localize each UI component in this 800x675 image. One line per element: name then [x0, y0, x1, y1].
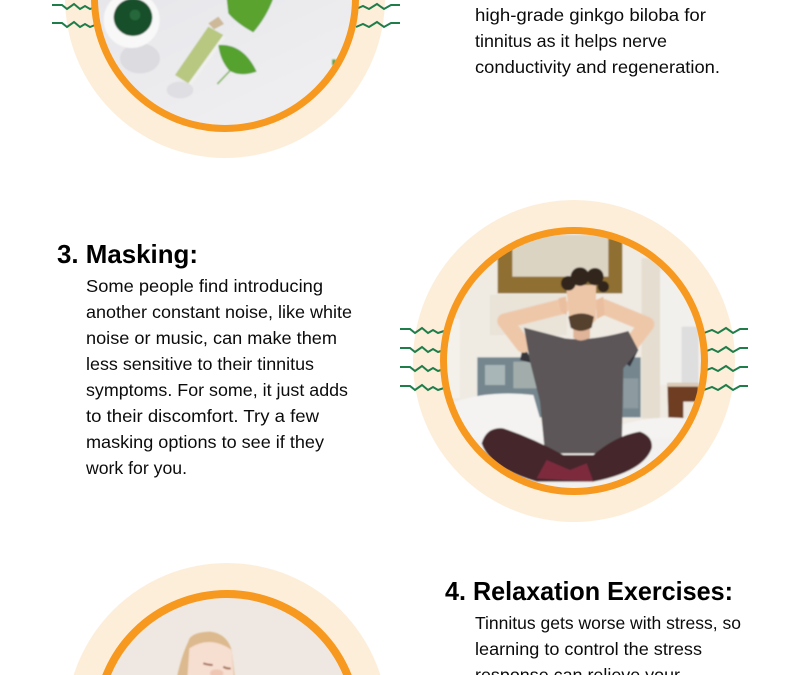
text block: ginkgo biloba: conductivity and regeneration.: [475, 57, 720, 77]
text block: ginkgo biloba: high-grade ginkgo biloba for: [475, 5, 706, 25]
heading: 3. Masking: 3. Masking:: [57, 239, 198, 269]
icon: sound waves left: [400, 328, 444, 390]
panel: relaxation image circle: [66, 563, 388, 675]
panel: ginkgo biloba image circle: [52, 0, 400, 158]
text block: masking: Some people find introducing: [86, 276, 323, 296]
text block: masking: less sensitive to their tinnitus: [86, 354, 314, 374]
icon: sound waves right: [704, 328, 748, 390]
text block: relaxation exercises: Tinnitus gets worse with stress, so: [475, 613, 741, 633]
photo: woman relaxing with eyes closed: [177, 632, 235, 675]
peach backdrop circle: [413, 200, 735, 522]
orange ring: [97, 594, 357, 675]
photo: man covering his ears on a bed: [440, 232, 707, 492]
panel: masking image circle: [400, 200, 748, 522]
peach backdrop circle: [65, 0, 385, 158]
orange ring: [95, 0, 355, 128]
text block: masking: [85, 276, 352, 478]
text block: ginkgo biloba: tinnitus as it helps nerve: [475, 31, 667, 51]
text block: masking: another constant noise, like white: [86, 302, 352, 322]
peach backdrop circle: [66, 563, 388, 675]
text block: ginkgo biloba: [475, 5, 720, 77]
text block: masking: to their discomfort. Try a few: [86, 406, 319, 426]
text block: masking: noise or music, can make them: [86, 328, 337, 348]
icon: sound waves right: [356, 4, 400, 27]
orange ring: [444, 231, 704, 491]
text block: masking: work for you.: [85, 458, 187, 478]
text block: masking: masking options to see if they: [86, 432, 324, 452]
heading: 4. Relaxation Exercises: 4. Relaxation Exercises:: [445, 576, 733, 606]
text block: relaxation exercises: learning to control the stress: [475, 639, 702, 659]
text block: relaxation exercises: [475, 613, 741, 675]
icon: sound waves left: [52, 4, 95, 27]
photo: ginkgo leaves and vial: [98, 0, 352, 125]
text block: masking: symptoms. For some, it just adds: [86, 380, 348, 400]
